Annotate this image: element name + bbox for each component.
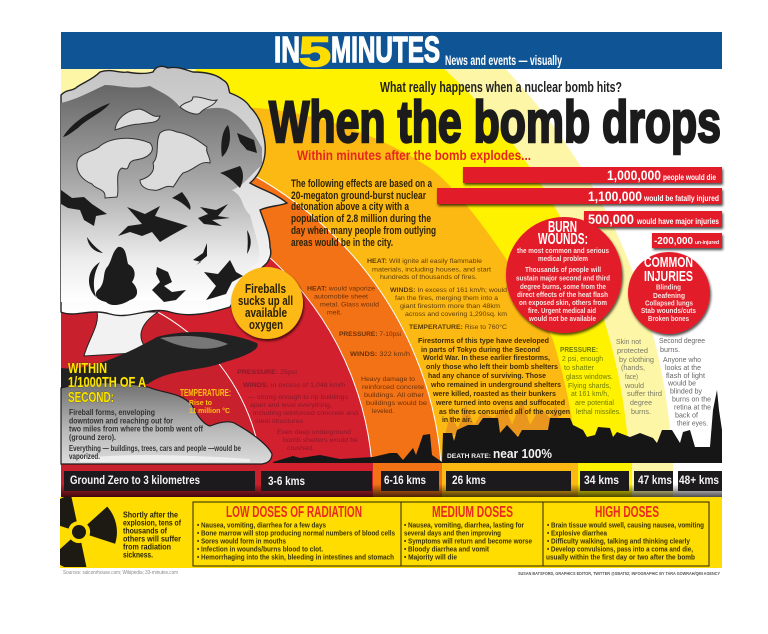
bar: would die: people would die	[663, 173, 716, 182]
high doses: • Brain tissue would swell, causing nausea, vomiting	[547, 520, 704, 530]
bar: major injuries: 500,000	[588, 211, 634, 227]
zone 47 km text: (hands,	[621, 365, 645, 372]
sources: Sources: salconrhouse.com; Wikipedia; 33-minutes.com	[63, 570, 178, 576]
temperature	[180, 387, 231, 415]
zone 34 km text	[560, 347, 621, 416]
zone 6-16 km text: metal. Glass would	[320, 302, 379, 308]
common injuries circle	[628, 252, 710, 334]
zone 6-16 km text: PRESSURE: 7-10psi	[339, 331, 401, 338]
fireball callout	[231, 267, 303, 339]
radiation note: from radiation	[123, 542, 171, 552]
zone 34 km text: lethal missiles.	[576, 409, 621, 416]
firestorm paragraph: Firestorms of this type have developed	[418, 336, 549, 345]
light puffs	[77, 97, 217, 198]
low doses	[197, 504, 395, 562]
intro text: population of 2.8 million during the	[291, 213, 431, 225]
temperature: TEMPERATURE:	[180, 387, 231, 399]
common injuries circle: COMMON	[644, 254, 693, 271]
doses box	[193, 502, 709, 566]
red subheading: Within minutes after the bomb explodes...	[297, 148, 531, 163]
fireball description	[69, 408, 242, 461]
intro text: The following effects are based on a	[291, 178, 433, 190]
zone 3-6 km text: crushed.	[287, 445, 314, 452]
zone 48+ km text	[659, 338, 711, 428]
radiation note: others will suffer	[123, 534, 181, 544]
zone 48+ km text: would be	[667, 380, 696, 388]
medium doses: several days and then improving	[404, 528, 501, 538]
intro text: detonation above a city with a	[291, 201, 410, 213]
zone 6-16 km text: HEAT: would vaporize	[307, 286, 375, 292]
zone 3-6 km text: including reinforced concrete and	[253, 410, 358, 417]
zone 6-16 km text: automobile sheet	[314, 294, 368, 300]
zone 26 km upper text: WINDS: In excess of 161 km/h; would	[390, 287, 507, 294]
ground zero text	[68, 360, 242, 461]
common injuries circle: Stab wounds/cuts	[641, 308, 696, 315]
burn wounds circle: Thousands of people will	[525, 267, 601, 274]
medium doses: • Nausea, vomiting, diarrhea, lasting for	[404, 520, 524, 530]
burn wounds circle: the most common and serious	[517, 248, 609, 255]
zone 3-6 km text: apart and level everything,	[250, 402, 332, 409]
zone 26 km upper text: fan the fires, merging them into a	[395, 295, 498, 302]
distance labels: 3-6 kms	[268, 474, 305, 488]
intro text: 20-megaton ground-burst nuclear	[291, 190, 427, 202]
bar: uninjured: -200,000	[654, 235, 693, 247]
firestorm paragraph: in parts of Tokyo during the Second	[421, 345, 540, 354]
cloud stem	[84, 312, 158, 356]
zone 47 km text: burns.	[631, 409, 651, 416]
within a second heading	[68, 360, 146, 406]
medium doses: MEDIUM DOSES	[432, 504, 513, 521]
radiation note: Shortly after the	[123, 510, 179, 520]
distance labels: 6-16 kms	[384, 473, 426, 487]
icon: radiation symbol	[60, 497, 117, 567]
death rate: near 100%	[493, 446, 552, 461]
zone 47 km text: would	[624, 383, 644, 390]
zone 47 km text: Skin not	[616, 339, 641, 346]
header banner	[61, 28, 722, 75]
zone 34 km text: are potential	[575, 400, 614, 407]
zone 48+ km text: burns on the	[672, 396, 711, 404]
fireball callout: sucks up all	[238, 293, 293, 308]
intro text	[291, 178, 436, 249]
bar: major injuries	[584, 211, 722, 227]
firestorm paragraph: who remained in underground shelters	[430, 380, 561, 389]
fire silhouette	[445, 400, 562, 435]
burn wounds circle: sustain major second and third	[516, 276, 610, 282]
zone 34 km text: glass windows.	[566, 374, 613, 381]
firestorm paragraph: were killed, roasted as their bunkers	[432, 389, 556, 398]
high doses: • Develop convulsions, pass into a coma and die,	[547, 544, 693, 554]
intro text: areas would be in the city.	[291, 237, 393, 249]
zone 3-6 km text: PRESSURE: 25psi	[237, 369, 298, 376]
medium doses: • Bloody diarrhea and vomit	[404, 544, 489, 554]
zone 6-16 km text: Heavy damage to	[361, 376, 415, 383]
low doses: • Bone marrow will stop producing normal numbers of blood cells	[197, 528, 395, 538]
medium doses: • Majority will die	[404, 552, 457, 562]
header banner: MINUTES	[331, 29, 440, 70]
firestorm paragraph	[418, 336, 570, 424]
fireball callout: available	[245, 305, 287, 320]
zone 26 km upper text: TEMPERATURE: Rise to 760°C	[409, 323, 507, 331]
firestorm paragraph: only those who left their bomb shelters	[426, 362, 558, 371]
fireball description: downtown and reaching out for	[69, 416, 173, 426]
within a second heading: SECOND:	[68, 389, 114, 406]
zone 47 km text: degree	[630, 400, 652, 407]
high doses: • Explosive diarrhea	[547, 528, 608, 538]
zone 3-6 km text: WINDS: in excess of 1,048 km/h	[243, 382, 345, 389]
zone 47 km text	[616, 339, 662, 416]
burn wounds circle	[506, 217, 622, 333]
zone 34 km text: PRESSURE:	[560, 347, 598, 354]
cloud base and smoke	[61, 332, 272, 464]
burn wounds circle: direct effects of the heat flash	[517, 292, 608, 299]
zone 48+ km text: burns.	[660, 347, 680, 354]
fireball description: vaporized.	[69, 452, 100, 461]
zone 47 km text: face)	[625, 374, 638, 381]
burn wounds circle: WOUNDS:	[538, 231, 588, 248]
fireball description: (ground zero).	[69, 433, 116, 442]
header banner: 5	[299, 28, 331, 75]
medium doses: • Symptoms will return and become worse	[404, 536, 532, 546]
zone 47 km text: protected	[617, 348, 648, 355]
distance labels	[64, 471, 722, 491]
bar: major injuries: would have major injuries	[636, 217, 719, 226]
zone 47 km text: by clothing	[619, 357, 654, 364]
death rate: DEATH RATE:	[447, 453, 491, 460]
header banner: IN	[274, 29, 300, 70]
temperature: 11 million °C	[189, 406, 231, 415]
radiation note: sickness.	[123, 550, 153, 560]
fireball callout: oxygen	[249, 317, 283, 332]
distance labels: 26 kms	[452, 473, 486, 487]
low doses: • Infection in wounds/burns blood to clot.	[197, 544, 323, 554]
burn wounds circle: fire. Urgent medical aid	[528, 308, 596, 315]
low doses: • Hemorrhaging into the skin, bleeding in intestines and stomach	[197, 552, 394, 562]
blast zone background	[60, 69, 722, 497]
bar: fatally injured: would be fatally injured	[643, 194, 719, 203]
skyline	[273, 390, 722, 463]
common injuries circle: Broken bones	[648, 316, 689, 323]
firestorm paragraph: World War. In these earlier firestorms,	[423, 353, 550, 362]
radiation note: thousands of	[123, 526, 167, 536]
cloud cap	[61, 66, 287, 316]
zone 48+ km text: flash of light	[666, 373, 705, 380]
bar: would die: 1,000,000	[607, 167, 661, 183]
credits: SUSAN BATSFORD, GRAPHICS EDITOR, TWITTER @SBAT52; INFOGRAPHIC BY TARA GOWRAH/QMI AGENCY	[518, 571, 720, 576]
zone 6-16 km text: leveled.	[372, 408, 394, 415]
firestorm paragraph: were turned into ovens and suffocated	[435, 398, 565, 407]
distance labels: Ground Zero to 3 kilometres	[70, 473, 200, 487]
zone 26 km upper text: materials, including houses, and start	[372, 266, 491, 274]
zone 6-16 km text: WINDS: 322 km/h	[350, 351, 410, 358]
zone 48+ km text: back of	[675, 412, 698, 420]
low doses: • Sores would form in mouths	[197, 536, 286, 546]
casualty bars	[437, 167, 722, 248]
radiation note	[123, 510, 181, 560]
common injuries circle: INJURIES	[644, 268, 693, 285]
bar: uninjured: un-injured	[695, 240, 719, 246]
zone 48+ km text: Anyone who	[663, 357, 701, 364]
high doses	[546, 504, 704, 562]
zone 6-16 km text: buildings. All other	[364, 392, 425, 399]
burn wounds circle: degree burns, some from the	[520, 284, 606, 291]
fireball callout: Fireballs	[245, 281, 286, 296]
firestorm paragraph: had any chance of surviving. Those	[428, 371, 546, 380]
zone 48+ km text: blinded by	[670, 388, 702, 396]
zone 6-16 km text: reinforced concrete	[362, 384, 424, 391]
medium doses	[404, 504, 532, 562]
common injuries circle: Collapsed lungs	[645, 300, 693, 308]
fireball description: Fireball forms, enveloping	[69, 408, 155, 417]
dark smoke marks	[61, 103, 257, 305]
zone 3-6 km text: steel structures.	[255, 418, 305, 425]
header banner: News and events — visually	[445, 52, 562, 68]
zone 26 km upper text	[367, 258, 507, 331]
zone 26 km upper text: across and covering 1,290sq. km	[405, 311, 507, 318]
burn wounds circle: BURN	[548, 219, 577, 236]
zone 26 km upper text: giant firestorm more than 48km	[400, 303, 500, 310]
zone 34 km text: at 161 km/h,	[571, 391, 609, 398]
high doses: HIGH DOSES	[595, 504, 659, 521]
distance labels: 48+ kms	[679, 473, 719, 487]
zone 26 km upper text: HEAT: Will ignite all easily flammable	[367, 258, 482, 265]
firestorm paragraph: in the air.	[442, 415, 472, 424]
zone 3-6 km text: bomb shelters would be	[283, 437, 358, 444]
radiation panel	[43, 495, 722, 570]
within a second heading: 1/1000TH OF A	[68, 374, 146, 391]
cloud inner shading	[61, 85, 262, 302]
bar: fatally injured	[437, 188, 722, 204]
mushroom cloud	[61, 66, 287, 464]
high doses: usually within the first day or two after the bomb	[546, 552, 695, 562]
zone 6-16 km text: melt.	[327, 310, 342, 316]
intro text: day when many people from outlying	[291, 225, 436, 237]
zone 48+ km text: looks at the	[665, 365, 701, 372]
common injuries circle: Blinding	[656, 284, 681, 292]
temperature: Rise to	[189, 398, 212, 407]
radiation note: explosion, tens of	[123, 518, 181, 528]
zone 3-6 km text: — strong enough to rip buildings	[248, 394, 349, 401]
zone 48+ km text: retina at the	[674, 404, 711, 412]
zone 34 km text: to shatter	[564, 365, 595, 372]
question heading: What really happens when a nuclear bomb hits?	[380, 79, 622, 96]
zone 34 km text: Flying shards,	[568, 383, 611, 390]
burn wounds circle: on exposed skin, others from	[519, 300, 607, 307]
bar: would die	[463, 167, 722, 183]
within a second heading: WITHIN	[68, 360, 107, 377]
zone 48+ km text: Second degree	[659, 338, 705, 345]
firestorm paragraph: as the fires consumed all of the oxygen	[439, 407, 570, 416]
zone 3-6 km text: Even deep underground	[277, 429, 351, 436]
common injuries circle: Deafening	[653, 293, 685, 300]
zone 6-16 km text	[307, 286, 427, 415]
bar: fatally injured: 1,100,000	[588, 188, 642, 204]
zone 47 km text: suffer third	[627, 391, 662, 398]
distance labels: 47 kms	[638, 473, 672, 487]
zone 3-6 km text	[237, 369, 358, 452]
fireball description: Everything — buildings, trees, cars and people —would be	[69, 444, 242, 453]
low doses: LOW DOSES OF RADIATION	[226, 504, 362, 521]
burn wounds circle: would not be available	[528, 316, 596, 323]
zone 26 km upper text: hundreds of thousands of fires.	[380, 274, 477, 281]
burn wounds circle: medical problem	[538, 256, 588, 263]
bar: uninjured	[652, 233, 722, 248]
high doses: • Difficulty walking, talking and thinking clearly	[547, 536, 691, 546]
death rate	[447, 446, 552, 461]
zone 34 km text: 2 psi, enough	[562, 356, 603, 363]
zone 6-16 km text: buildings would be	[366, 400, 427, 407]
low doses: • Nausea, vomiting, diarrhea for a few days	[197, 520, 326, 530]
fireball description: two miles from where the bomb went off	[69, 424, 203, 434]
zone 48+ km text: their eyes.	[677, 420, 708, 428]
distance labels: 34 kms	[584, 473, 619, 487]
